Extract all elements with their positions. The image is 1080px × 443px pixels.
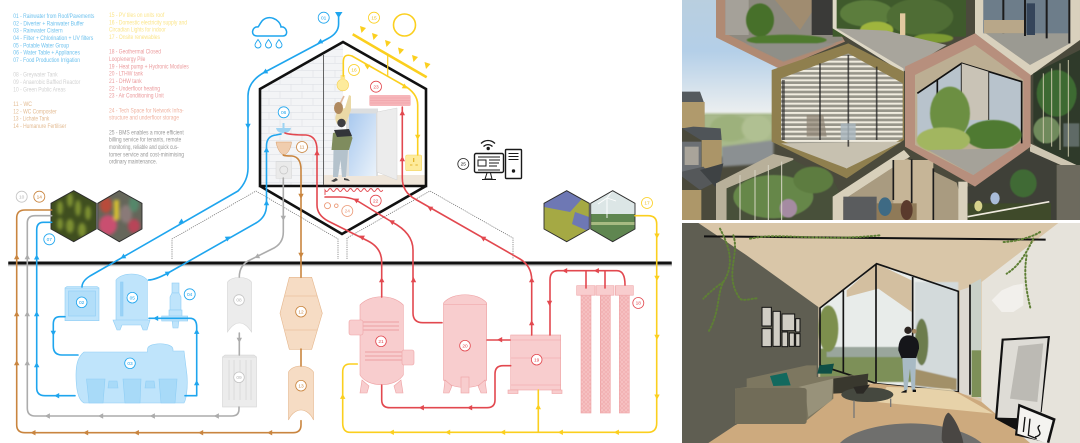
sky bbox=[682, 0, 782, 115]
partition wall bbox=[322, 55, 324, 185]
tech label bbox=[342, 206, 353, 216]
ceiling beam bbox=[704, 236, 1046, 240]
tan labels bbox=[34, 142, 308, 391]
icon: WC bbox=[276, 142, 292, 155]
BMS label bbox=[458, 158, 469, 170]
legend: water items: 03 - Rainwater Cistern bbox=[13, 28, 63, 35]
yellow labels: 15 bbox=[371, 15, 377, 21]
legend: electricity items bbox=[109, 12, 187, 41]
legend: electricity items: 15 - PV tiles on units roof bbox=[109, 12, 165, 19]
pipes: rainwater and potable water bbox=[34, 12, 342, 398]
04 filter bbox=[162, 283, 188, 328]
legend: water items: 05 - Potable Water Group bbox=[13, 42, 69, 49]
icon: AC unit bbox=[369, 95, 411, 106]
legend: BMS note bbox=[109, 129, 184, 166]
bottom-right garden bbox=[968, 150, 1080, 220]
legend: greywater items: 10 - Green Public Areas bbox=[13, 86, 66, 93]
equipment: compost system bbox=[280, 277, 322, 420]
icon: sun bbox=[394, 14, 416, 36]
legend: heating items: 21 - DHW tank bbox=[109, 78, 142, 85]
red labels: 18 bbox=[636, 301, 641, 307]
legend: water items: 02 - Diverter + Rainwater Buffer bbox=[13, 20, 84, 27]
02 rainwater buffer bbox=[65, 286, 99, 321]
legend: compost items: 11 - WC bbox=[13, 101, 32, 108]
hanging plants bbox=[703, 229, 1040, 332]
top-centre terrace and garden bbox=[833, 0, 966, 73]
blue labels: 04 bbox=[187, 292, 193, 298]
legend: heating items: 23 - Air Conditioning Unit bbox=[109, 93, 164, 100]
legend: BMS note: tomer service and cost-minimising bbox=[109, 151, 184, 158]
numbered labels bbox=[16, 12, 652, 391]
wall trophy sculpture bbox=[992, 284, 1023, 312]
window view bbox=[818, 264, 981, 399]
legend: greywater items bbox=[13, 72, 80, 93]
icon: tech space ducts bbox=[324, 203, 338, 209]
legend: water items: 04 - Filter + Chlorination + UV filters bbox=[13, 35, 93, 42]
yellow labels bbox=[348, 12, 652, 209]
legend: heating items: Loop/energy Pile bbox=[109, 56, 146, 63]
blue labels: 01 bbox=[321, 15, 327, 21]
tech label: 24 bbox=[345, 209, 350, 215]
bottom-left unit bbox=[716, 154, 843, 220]
icon: PV panel with sun rays bbox=[353, 26, 430, 77]
legend: greywater items: 08 - Greywater Tank bbox=[13, 72, 58, 79]
legend: water items: 07 - Food Production Irrigation bbox=[13, 57, 80, 64]
photo: interior living room bbox=[682, 223, 1080, 443]
ground line bbox=[8, 263, 672, 264]
red labels: 23 bbox=[373, 84, 379, 90]
red labels: 21 bbox=[378, 339, 384, 345]
pipes: heating bbox=[285, 107, 625, 410]
03 rainwater cistern bbox=[76, 344, 187, 403]
blue labels: 03 bbox=[127, 361, 133, 367]
icon: wifi and computer bbox=[474, 140, 522, 180]
yellow labels: 17 bbox=[644, 201, 650, 207]
icon: light bulb bbox=[337, 75, 349, 91]
legend: heating items: 18 - Geothermal Closed bbox=[109, 49, 161, 56]
floor bbox=[708, 384, 1030, 443]
legend: BMS note: billing service for tenants, remote bbox=[109, 137, 182, 144]
legend: heating items: 22 - Underfloor heating bbox=[109, 85, 160, 92]
wood ceiling bbox=[698, 223, 1058, 307]
house frame bbox=[260, 42, 426, 234]
red labels bbox=[370, 81, 644, 365]
grey labels: 10 bbox=[19, 194, 25, 200]
red labels: 20 bbox=[462, 343, 468, 349]
legend: electricity items: 17 - Onsite renewables bbox=[109, 34, 160, 41]
legend: water items bbox=[13, 13, 94, 64]
icon: underfloor heating coil bbox=[325, 188, 383, 195]
left dark wall bbox=[682, 223, 818, 443]
equipment: heating system bbox=[349, 286, 633, 413]
hexagon photo: green public area bbox=[50, 190, 98, 242]
blue labels: 02 bbox=[79, 300, 85, 306]
blue labels: 05 bbox=[130, 295, 135, 301]
09 anaerobic reactor bbox=[222, 355, 256, 407]
sofa bbox=[735, 364, 868, 424]
13 lichate tank bbox=[288, 366, 314, 420]
hexagon photo: PV roof bbox=[544, 191, 589, 241]
legend: compost items: 12 - WC Composter bbox=[13, 108, 57, 115]
house bbox=[260, 42, 426, 234]
legend: greywater items: 09 - Anaerobic Baffled Reactor bbox=[13, 79, 80, 86]
hexagon photo: wind turbine bbox=[590, 190, 636, 242]
05 potable water tank bbox=[113, 274, 150, 330]
08 greywater tank bbox=[228, 278, 252, 332]
legend: heating items: 19 - Heat pump + Hydronic Modules bbox=[109, 63, 189, 70]
beige slatted hex unit bbox=[772, 43, 904, 178]
photo: hexagonal housing exterior bbox=[682, 0, 1080, 220]
right white wall bbox=[982, 223, 1080, 443]
20 LTHW tank bbox=[444, 295, 487, 393]
equipment: grey greywater system bbox=[222, 278, 256, 407]
tan labels: 13 bbox=[298, 383, 304, 389]
right side green facade bbox=[1030, 50, 1080, 173]
legend: electricity items: 16 - Domestic electricity supply and bbox=[109, 19, 187, 26]
equipment: blue water system bbox=[65, 274, 188, 403]
tan labels: 12 bbox=[298, 309, 304, 315]
round rug bbox=[840, 423, 982, 443]
legend: compost items bbox=[13, 101, 66, 130]
bottom-centre unit bbox=[833, 150, 968, 220]
family figures bbox=[331, 95, 352, 182]
icon: washing machine bbox=[276, 162, 292, 178]
icon: water basin bbox=[276, 123, 291, 133]
house interior left brick room bbox=[260, 42, 343, 185]
coffee table bbox=[841, 385, 893, 418]
yellow labels: 16 bbox=[351, 68, 357, 74]
hexagon outlines bbox=[544, 191, 635, 242]
neighbouring houses bbox=[682, 92, 723, 220]
legend: heating items bbox=[109, 49, 189, 100]
hexagon outlines bbox=[51, 191, 142, 242]
21 DHW tank bbox=[349, 297, 414, 393]
person at window bbox=[898, 327, 919, 393]
legend: compost items: 13 - Lichate Tank bbox=[13, 116, 50, 123]
icon: socket bbox=[406, 155, 422, 171]
18 geothermal piles bbox=[577, 286, 633, 413]
background trees bbox=[703, 113, 773, 167]
dotted service outlines bbox=[172, 191, 513, 259]
top-right hex unit bbox=[975, 0, 1080, 76]
legend: BMS note: 25 - BMS enables a more efficient bbox=[109, 129, 184, 136]
pipes: greywater bbox=[25, 178, 286, 419]
blue labels: 06 bbox=[281, 110, 287, 116]
19 heat pump bbox=[508, 335, 562, 394]
tan labels: 14 bbox=[37, 194, 42, 200]
legend: BMS note: ordinary maintenance. bbox=[109, 159, 157, 166]
small art print bbox=[1015, 404, 1056, 443]
pipes: electricity bbox=[340, 55, 660, 435]
12 composter bbox=[280, 277, 322, 349]
blue labels: 07 bbox=[47, 237, 52, 243]
hexagon photo: food production bbox=[97, 190, 143, 242]
grey labels bbox=[16, 191, 244, 383]
legend: compost items: 14 - Humanure Fertiliser bbox=[13, 123, 66, 130]
legend: tech space: structure and underfloor storage bbox=[109, 115, 179, 122]
pipes: compost bbox=[14, 155, 304, 435]
top-left hex unit bbox=[716, 0, 845, 69]
tan labels: 11 bbox=[300, 145, 305, 151]
icon: rain cloud bbox=[253, 18, 287, 48]
large map poster bbox=[995, 336, 1050, 430]
pink framed hex unit with planter bbox=[905, 33, 1031, 187]
legend: heating items: 20 - LTHW tank bbox=[109, 71, 144, 78]
blue labels bbox=[44, 12, 329, 369]
gallery wall frames bbox=[762, 307, 800, 347]
legend: water items: 01 - Rainwater from Roof/Pavements bbox=[13, 13, 94, 20]
cat bbox=[942, 413, 963, 443]
legend: BMS note: monitoring, reliable and quick cus- bbox=[109, 144, 179, 151]
legend: tech space: 24 - Tech Space for Network Infra- bbox=[109, 107, 184, 114]
legend: electricity items: Circadian Lights for indoor bbox=[109, 27, 166, 34]
BMS label: 25 bbox=[461, 162, 466, 168]
legend: tech space bbox=[109, 107, 184, 122]
legend: water items: 06 - Water Table + Appliances bbox=[13, 50, 80, 57]
house interior floor bbox=[324, 175, 426, 185]
legend text bbox=[13, 12, 189, 166]
grey labels: 08 bbox=[236, 298, 242, 304]
door opening with sky bbox=[346, 108, 397, 180]
red labels: 19 bbox=[534, 357, 540, 363]
red labels: 22 bbox=[373, 198, 379, 204]
grey labels: 09 bbox=[236, 375, 242, 381]
